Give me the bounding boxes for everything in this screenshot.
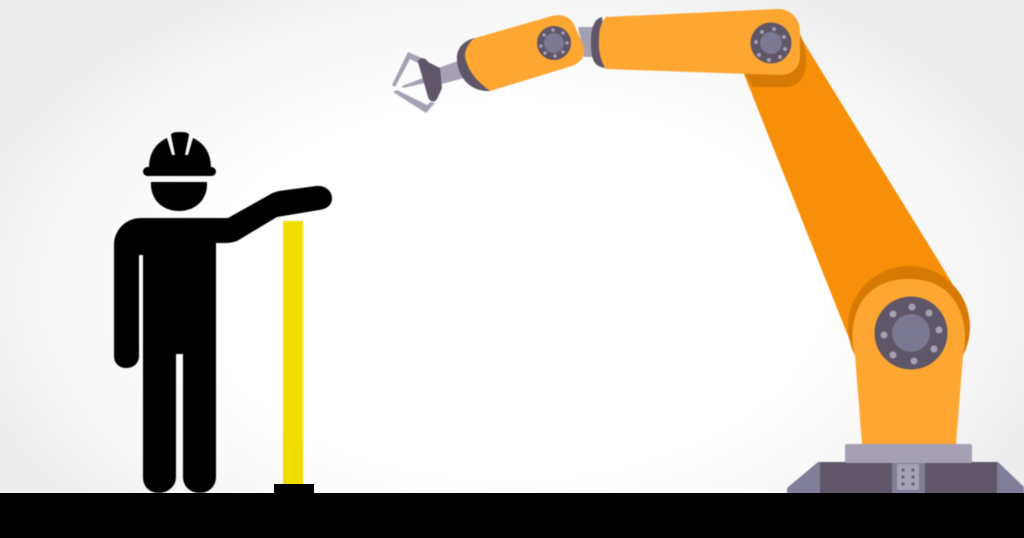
ground [0,493,1024,538]
robot arm [392,9,1024,494]
robot base [787,444,1024,494]
pole foot [274,484,314,494]
upper arm back cap [591,17,606,68]
robot column [853,279,965,444]
joint shadow upper [744,32,806,87]
upper arm segment [599,9,800,75]
elbow connector [578,27,596,57]
worker figure [114,132,332,493]
wrist connector [438,61,464,84]
wrist joint hub [537,26,571,60]
joint shadow lower [848,266,970,388]
elbow joint hub [750,22,792,64]
lower arm segment [744,33,966,356]
forearm segment [465,15,584,91]
gripper claw [392,52,442,113]
head [151,182,207,211]
yellow safety pole [283,221,303,485]
hard hat [143,132,216,176]
body [114,186,332,493]
main joint hub [874,296,948,370]
forearm back cap [457,38,490,91]
